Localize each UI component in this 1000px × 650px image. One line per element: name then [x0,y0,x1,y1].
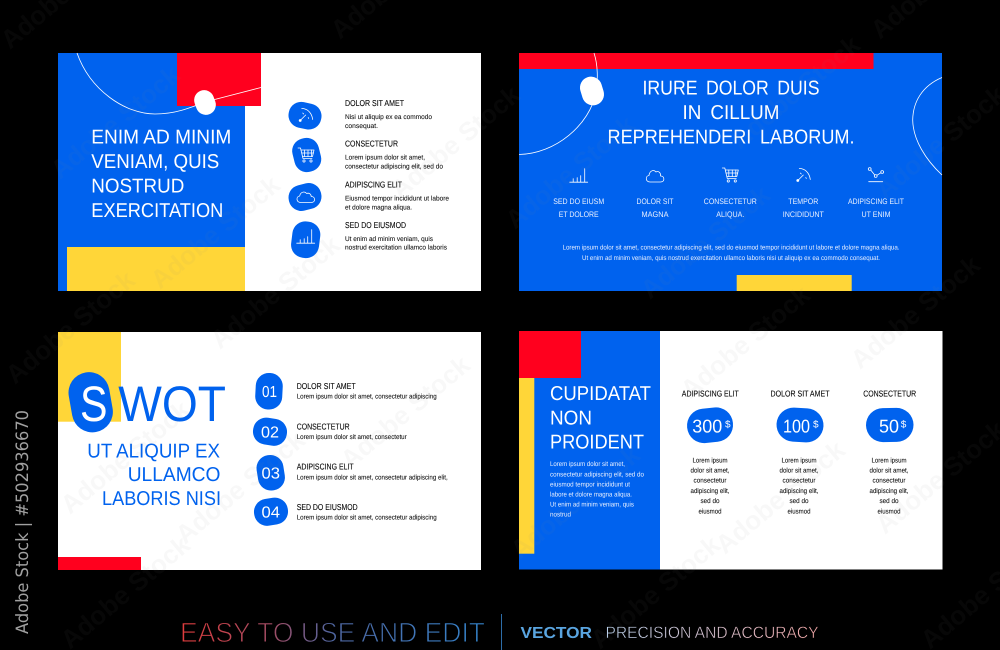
watermark: Adobe Stock [500,109,641,235]
icon: line graph [868,168,884,182]
heading: IN CILLUM [682,102,780,124]
heading: PROIDENT [550,432,644,454]
paragraph: Ut enim ad minim veniam, quis nostrud exercitation ullamco laboris nisi ut aliquip ex ea commodo consequat. [582,255,880,262]
paragraph: Lorem ipsum dolor sit amet, [550,461,625,468]
price column 300: consectetur [694,478,727,485]
icon: cloud [646,171,664,182]
price column 100: sed do [790,498,809,505]
watermark: Adobe Stock [725,29,866,155]
list text [297,381,448,522]
white blob marker [191,87,219,118]
icon: cart in blob [289,135,324,175]
item list: nostrud exercitation ullamco laboris [345,245,448,252]
paragraph: labore et dolore magna aliqua. [550,491,632,498]
footer tagline: EASY TO USE AND EDIT [180,617,485,648]
list text: ADIPISCING ELIT [297,462,354,472]
watermark: Adobe Stock [635,179,776,305]
paragraph: consectetur adipiscing elit, sed do [550,471,644,478]
price column 300: ADIPISCING ELIT [682,388,739,398]
icon: cart [722,168,738,182]
subtitle: ULLAMCO [128,464,220,486]
price column 50: adipiscing elit, [870,488,909,495]
price column 100: $ [813,420,819,431]
item list: consectetur adipiscing elit, sed do [345,164,443,171]
number 04 [252,496,290,528]
SWOT title: WOT [118,376,226,432]
number 02 [251,416,289,448]
white blob marker [577,74,607,108]
price column 300: Lorem ipsum [692,457,728,464]
icon: cloud in blob [286,180,324,214]
watermark: Adobe Stock [710,434,851,560]
blob behind S [65,369,116,436]
heading: CUPIDATAT [550,383,651,405]
paragraph: Ut enim ad minim veniam, quis [550,502,635,509]
item list: Lorem ipsum dolor sit amet, [345,155,425,162]
price column 100: 100 [783,415,810,436]
icon labels: SED DO EIUSM [553,197,604,206]
price column 300: dolor sit amet, [690,468,730,475]
panel: bottom-right slide [519,331,942,570]
panel: top-left slide [58,53,481,291]
item list: CONSECTETUR [345,138,398,148]
watermark: Adobe Stock [675,279,816,405]
number 01: 01 [262,384,277,401]
price column 50: $ [901,420,907,431]
icon labels: UT ENIM [862,210,891,219]
list text: DOLOR SIT AMET [297,381,356,391]
subtitle: UT ALIQUIP EX [87,440,220,462]
number 03 [255,453,287,492]
heading: EXERCITATION [91,200,223,222]
heading: NOSTRUD [91,176,184,198]
icon: bar chart in blob [290,220,322,260]
heading: NON [550,407,592,429]
item list: Nisi ut aliquip ex ea commodo [345,114,432,121]
price column 50: CONSECTETUR [863,388,916,398]
icon labels: ALIQUA. [716,210,744,219]
icon labels: ET DOLORE [559,210,599,219]
watermark: Adobe Stock [205,229,346,355]
heading [550,383,651,454]
price column 50 [863,388,916,515]
panel: bottom-left slide [58,332,481,570]
price column 100: DOLOR SIT AMET [770,388,830,398]
heading [91,127,231,222]
price column 100: Lorem ipsum [782,457,817,464]
watermark: Adobe Stock [335,349,476,475]
number 03: 03 [262,466,280,483]
heading: IRURE DOLOR DUIS [642,77,820,99]
price column 50: sed do [880,498,899,505]
price column 300: 300 [692,415,722,436]
icon: gauge in blob [286,100,324,132]
price column 300: adipiscing elit, [690,488,730,495]
price column 300 [682,388,739,515]
item list: Eiusmod tempor incididunt ut labore [345,195,449,202]
paragraph: eiusmod tempor incididunt ut [550,481,630,488]
price column 300: $ [725,420,731,431]
icon labels: INCIDIDUNT [783,210,824,219]
number 04: 04 [262,505,280,522]
price column 300: eiusmod [698,508,722,515]
heading [608,77,854,148]
price column 100: eiusmod [788,508,811,515]
item list: ADIPISCING ELIT [345,180,403,190]
paragraph [562,245,900,262]
watermark: Adobe Stock [0,264,141,390]
watermark: Adobe Stock [170,424,311,550]
watermark: Adobe Stock [845,249,986,375]
icon labels: ADIPISCING ELIT [848,197,904,206]
price column 100: consectetur [782,478,816,485]
icon: gauge [797,168,810,182]
price column 100: dolor sit amet, [780,468,819,475]
SWOT title [80,376,226,432]
item list: Ut enim ad minim veniam, quis [345,236,434,243]
footer tagline [180,614,818,650]
price column 50: 50 [879,415,899,436]
watermark: Adobe Stock [55,394,196,520]
subtitle: LABORIS NISI [102,488,221,510]
subtitle [87,440,221,510]
stock id vertical text: Adobe Stock | #502936670 [13,410,33,634]
item list: consequat. [345,123,378,130]
list text: Lorem ipsum dolor sit amet, consectetur adipiscing elit, [297,474,448,481]
icon labels: DOLOR SIT [636,197,674,206]
paragraph: nostrud [550,512,571,519]
price column 100: adipiscing elit, [780,488,819,495]
price column 50: eiusmod [878,508,901,515]
list text: Lorem ipsum dolor sit amet, consectetur [297,434,407,441]
icon labels: TEMPOR [788,197,818,206]
number 02: 02 [261,425,279,442]
price column 50: consectetur [872,478,906,485]
list text: Lorem ipsum dolor sit amet, consectetur adipiscing [297,515,437,522]
icon labels [553,197,904,219]
paragraph: Lorem ipsum dolor sit amet, consectetur adipiscing elit, sed do eiusmod tempor incididunt ut labore et dolore magna aliqua. [562,245,900,252]
item list: DOLOR SIT AMET [345,98,405,108]
footer tagline: PRECISION AND ACCURACY [606,624,818,642]
heading: REPREHENDERI LABORUM. [608,126,854,148]
price column 100 [770,388,830,515]
price column 300: sed do [700,498,720,505]
paragraph [550,461,644,519]
watermark: Adobe Stock [145,169,286,295]
watermark: Adobe Stock [505,439,646,565]
heading: ENIM AD MINIM [91,127,231,149]
icon: bar chart [570,169,588,182]
watermark: Adobe Stock [385,79,526,205]
heading: VENIAM, QUIS [91,151,219,173]
item list: et dolore magna aliqua. [345,204,412,211]
watermark: Adobe Stock [45,59,186,185]
price column 50: dolor sit amet, [870,468,909,475]
footer tagline: VECTOR [520,625,592,642]
SWOT title: S [80,376,108,432]
list text: Lorem ipsum dolor sit amet, consectetur adipiscing [297,394,437,401]
price column 50: Lorem ipsum [872,457,907,464]
item list [345,98,449,252]
item list: SED DO EIUSMOD [345,220,406,230]
list text: CONSECTETUR [297,421,350,431]
panel: top-right slide [519,53,942,291]
icon labels: MAGNA [642,210,669,219]
icon labels: CONSECTETUR [704,197,757,206]
number 01 [255,372,283,410]
list text: SED DO EIUSMOD [297,502,358,512]
